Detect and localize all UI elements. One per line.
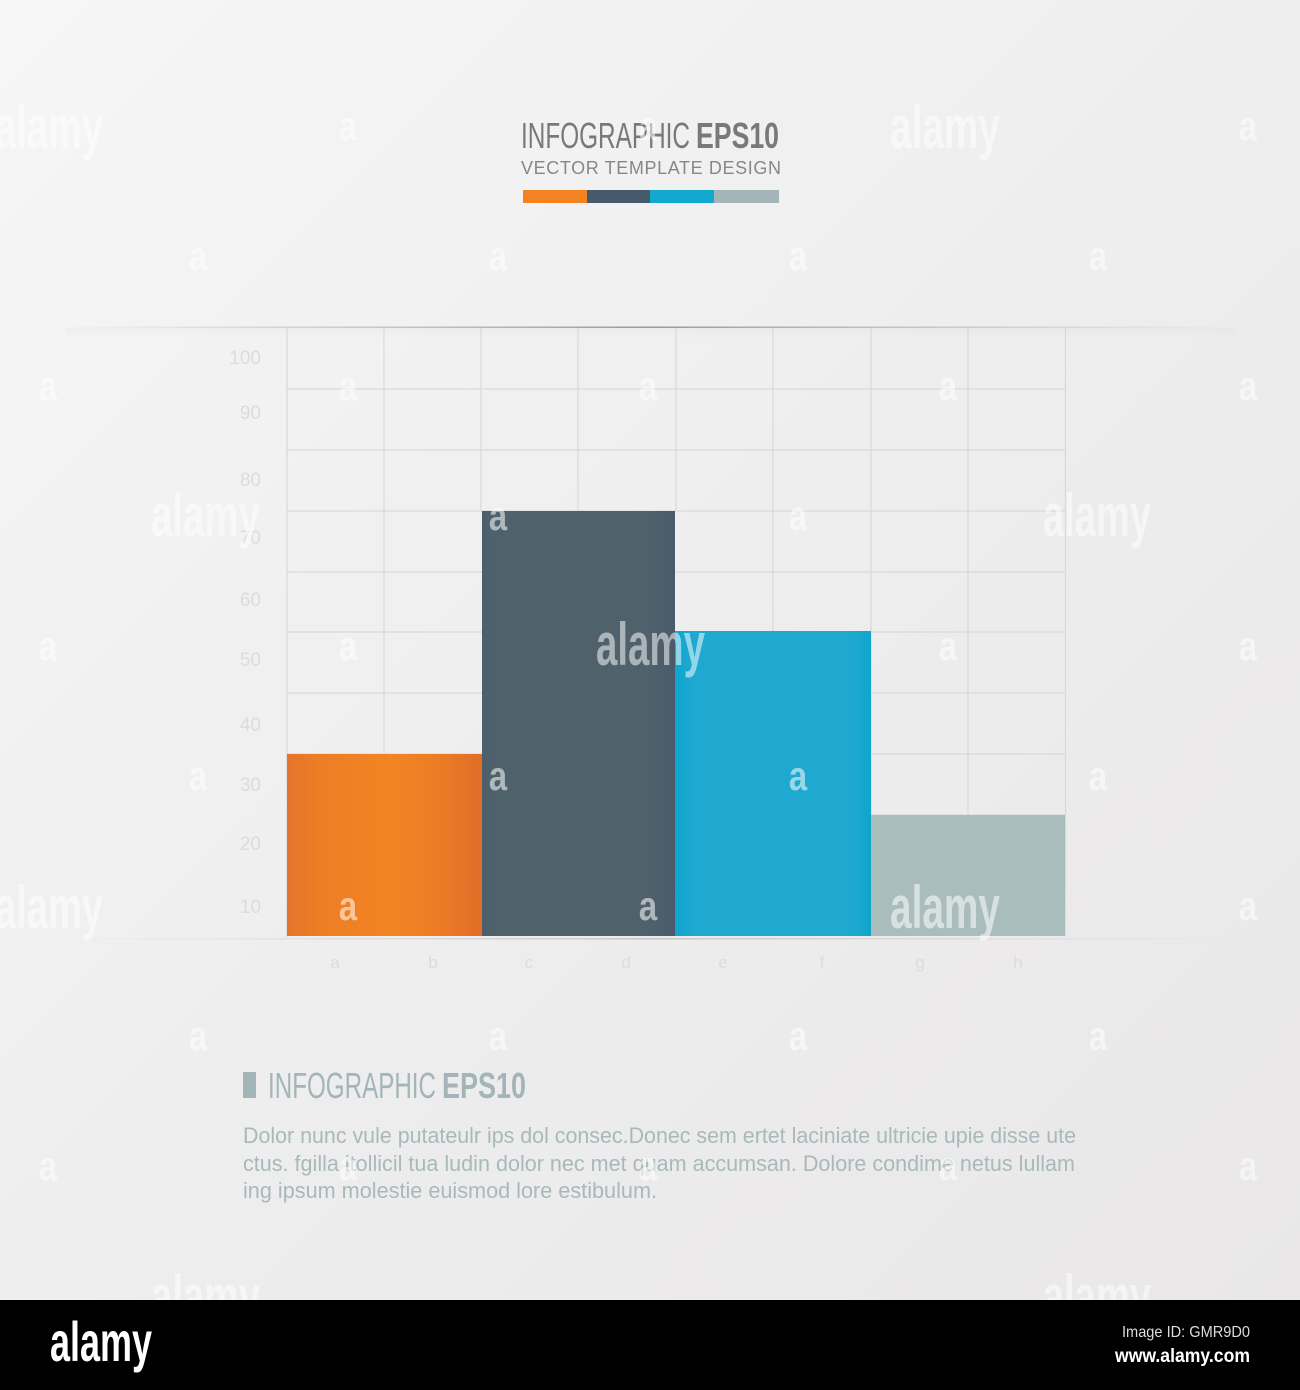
- bar chart: [287, 511, 1065, 936]
- watermark: small marks: a: [339, 622, 357, 669]
- watermark: small marks: a: [639, 102, 657, 149]
- y axis labels: 80: [240, 470, 261, 491]
- y axis labels: 20: [240, 834, 261, 855]
- x axis labels: c: [525, 953, 534, 972]
- y axis labels: 90: [240, 403, 261, 424]
- x axis labels: f: [820, 953, 825, 972]
- chart panel shadow lines: [65, 326, 1235, 940]
- watermark: large words: alamy: [1043, 482, 1151, 549]
- title block: [521, 115, 781, 203]
- subtitle: VECTOR TEMPLATE DESIGN: [521, 158, 781, 178]
- watermark: small marks: [39, 102, 1257, 1189]
- image id: Image ID: GMR9D0: [1122, 1324, 1250, 1341]
- colour key strip: [523, 190, 779, 203]
- watermark: large words: alamy: [0, 94, 103, 161]
- y axis labels: 100: [229, 348, 261, 369]
- watermark: small marks: a: [1089, 232, 1107, 279]
- watermark: small marks: a: [189, 752, 207, 799]
- watermark: small marks: a: [39, 362, 57, 409]
- watermark: small marks: a: [789, 752, 807, 799]
- watermark: small marks: a: [639, 882, 657, 929]
- watermark: small marks: a: [639, 1142, 657, 1189]
- bar: slate c-d: [482, 511, 675, 936]
- watermark: small marks: a: [639, 362, 657, 409]
- y axis labels: 40: [240, 715, 261, 736]
- watermark: small marks: a: [39, 1142, 57, 1189]
- x axis labels: b: [428, 953, 438, 972]
- watermark: small marks: a: [939, 622, 957, 669]
- watermark: small marks: a: [339, 362, 357, 409]
- watermark: large words: alamy: [890, 94, 1000, 161]
- watermark: small marks: a: [489, 492, 507, 539]
- y axis labels: 70: [240, 528, 261, 549]
- heading marker: [243, 1072, 256, 1098]
- watermark: large words: alamy: [151, 1263, 260, 1330]
- watermark: small marks: a: [1089, 1012, 1107, 1059]
- y axis labels: 50: [240, 650, 261, 671]
- title: infographic: INFOGRAPHIC: [521, 115, 690, 156]
- y axis labels: 60: [240, 590, 261, 611]
- watermark: small marks: a: [189, 1012, 207, 1059]
- title: eps10: EPS10: [696, 115, 779, 156]
- heading: eps10: EPS10: [442, 1065, 526, 1106]
- watermark: small marks: a: [939, 1142, 957, 1189]
- chart grid: [287, 328, 1066, 937]
- website: www.alamy.com: [1114, 1346, 1250, 1367]
- watermark: small marks: a: [1239, 362, 1257, 409]
- description block: [243, 1065, 1076, 1203]
- y axis labels: [229, 348, 261, 918]
- watermark: small marks: a: [1239, 622, 1257, 669]
- bar: grey g-h: [871, 815, 1065, 936]
- paragraph: ctus. fgilla itollicil tua ludin dolor nec met quam accumsan. Dolore condime netus lullam: [243, 1151, 1075, 1176]
- x axis labels: a: [330, 953, 340, 972]
- x axis labels: [330, 953, 1023, 972]
- watermark: large words: alamy: [890, 874, 1000, 941]
- x axis labels: g: [915, 953, 925, 972]
- watermark: small marks: a: [1089, 752, 1107, 799]
- watermark: small marks: a: [39, 622, 57, 669]
- watermark: large words: alamy: [0, 874, 103, 941]
- x axis labels: d: [621, 953, 631, 972]
- watermark: small marks: a: [489, 1012, 507, 1059]
- paragraph: ing ipsum molestie euismod lore estibulum.: [243, 1178, 657, 1203]
- watermark: small marks: a: [789, 1012, 807, 1059]
- bar: blue e-f: [675, 631, 871, 936]
- paragraph: [243, 1123, 1076, 1203]
- watermark: small marks: a: [1239, 102, 1257, 149]
- watermark: large words: alamy: [1043, 1263, 1151, 1330]
- heading: infographic: INFOGRAPHIC: [268, 1065, 436, 1106]
- watermark: small marks: a: [789, 232, 807, 279]
- watermark: small marks: a: [189, 232, 207, 279]
- watermark: small marks: a: [1239, 882, 1257, 929]
- watermark: small marks: a: [339, 882, 357, 929]
- watermark: large words: alamy: [596, 611, 705, 678]
- watermark: small marks: a: [339, 1142, 357, 1189]
- watermark: small marks: a: [1239, 1142, 1257, 1189]
- watermark: large words: [0, 94, 1151, 1330]
- watermark: small marks: a: [489, 232, 507, 279]
- y axis labels: 10: [240, 897, 261, 918]
- x axis labels: h: [1013, 953, 1023, 972]
- bar: orange a-b: [287, 754, 482, 936]
- paragraph: Dolor nunc vule putateulr ips dol consec.Donec sem ertet laciniate ultricie upie disse ute: [243, 1123, 1076, 1148]
- watermark: large words: alamy: [151, 482, 260, 549]
- y axis labels: 30: [240, 775, 261, 796]
- watermark: small marks: a: [789, 492, 807, 539]
- x axis labels: e: [718, 953, 728, 972]
- watermark: small marks: a: [489, 752, 507, 799]
- footer bar: [0, 1300, 1300, 1390]
- watermark: small marks: a: [339, 102, 357, 149]
- footer logo: alamy: [50, 1310, 152, 1373]
- watermark: small marks: a: [939, 362, 957, 409]
